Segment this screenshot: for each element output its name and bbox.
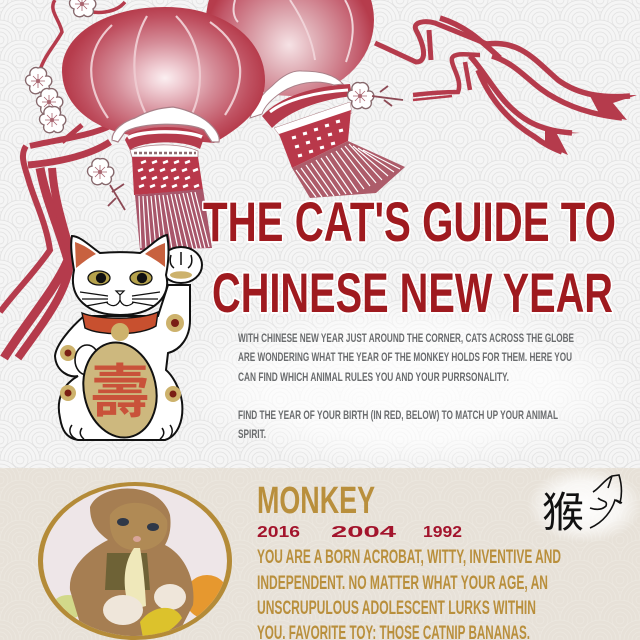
year 2016: 2016 bbox=[257, 524, 300, 541]
left ribbons bbox=[0, 125, 110, 358]
lantern net bbox=[132, 157, 203, 195]
plum blossom branch bbox=[26, 0, 403, 210]
lantern 2 net bbox=[279, 110, 351, 168]
bell bbox=[111, 323, 129, 341]
lantern 2 ribs bbox=[234, 0, 353, 62]
orange fruit bbox=[190, 575, 224, 616]
banana peel bbox=[140, 608, 182, 638]
right ribbons bbox=[375, 18, 637, 155]
intro text bbox=[238, 333, 574, 441]
intro line 5: SPIRIT. bbox=[238, 429, 266, 441]
cat face bbox=[110, 503, 167, 550]
photo bbox=[43, 486, 227, 636]
second lantern bbox=[206, 0, 405, 198]
lucky cat bbox=[55, 235, 202, 444]
lantern bead band bbox=[130, 145, 198, 157]
text glow bbox=[180, 300, 640, 470]
ink glow bbox=[527, 467, 640, 543]
twigs bbox=[108, 86, 403, 210]
intro line 3: CAN FIND WHICH ANIMAL RULES YOU AND YOUR PURRSONALITY. bbox=[238, 372, 509, 384]
year 1992: 1992 bbox=[423, 524, 462, 541]
banana bbox=[125, 548, 146, 610]
lantern neck bands bbox=[125, 127, 204, 150]
raised paw bbox=[160, 247, 202, 283]
lantern 2 tassel bbox=[292, 141, 405, 198]
lantern 2 neck bbox=[262, 84, 352, 128]
lower ribbon tail bbox=[545, 130, 580, 155]
ears bbox=[75, 242, 165, 268]
icon: monkey zodiac ink sketch bbox=[527, 467, 640, 543]
collar bbox=[82, 312, 158, 334]
year 2004: 2004 bbox=[331, 524, 396, 541]
zodiac character: 猴 bbox=[542, 489, 584, 536]
lower ribbon loop bbox=[413, 54, 480, 95]
branch bbox=[40, 0, 125, 70]
lantern ribs bbox=[91, 16, 240, 118]
lantern 2 lace trim bbox=[250, 71, 343, 118]
upper ribbon tail bbox=[590, 95, 637, 120]
lower ribbon strands bbox=[470, 56, 572, 152]
lantern body bbox=[62, 7, 265, 143]
paw pad bbox=[170, 271, 192, 279]
cat in monkey suit bbox=[70, 488, 193, 640]
suit chest bbox=[105, 553, 150, 590]
monkey sketch bbox=[590, 475, 622, 528]
panel: monkey band background bbox=[0, 468, 640, 640]
nose and whiskers bbox=[80, 291, 160, 306]
cat head bbox=[71, 235, 169, 315]
coin character: 壽 bbox=[91, 345, 149, 429]
flowers bbox=[26, 67, 52, 94]
green fruit bbox=[56, 595, 78, 618]
lower paw bbox=[75, 345, 99, 375]
photo frame bbox=[38, 482, 232, 640]
monkey photo bbox=[38, 480, 232, 640]
heading: monkey: MONKEY bbox=[257, 480, 375, 522]
lantern tassel bbox=[135, 189, 212, 250]
koban coin bbox=[75, 336, 165, 444]
title bbox=[203, 190, 616, 324]
cat body bbox=[55, 285, 190, 440]
cat feet toes bbox=[70, 425, 172, 439]
birth years bbox=[257, 524, 462, 541]
lantern 2 body bbox=[206, 0, 374, 96]
upper ribbon strands bbox=[440, 18, 630, 118]
lantern lace trim bbox=[112, 107, 219, 142]
monkey description bbox=[257, 547, 561, 640]
upper ribbon loop bbox=[375, 22, 487, 62]
main lantern bbox=[62, 7, 265, 250]
eyes bbox=[88, 271, 152, 285]
white paws bbox=[103, 595, 143, 625]
spots bbox=[60, 314, 184, 402]
